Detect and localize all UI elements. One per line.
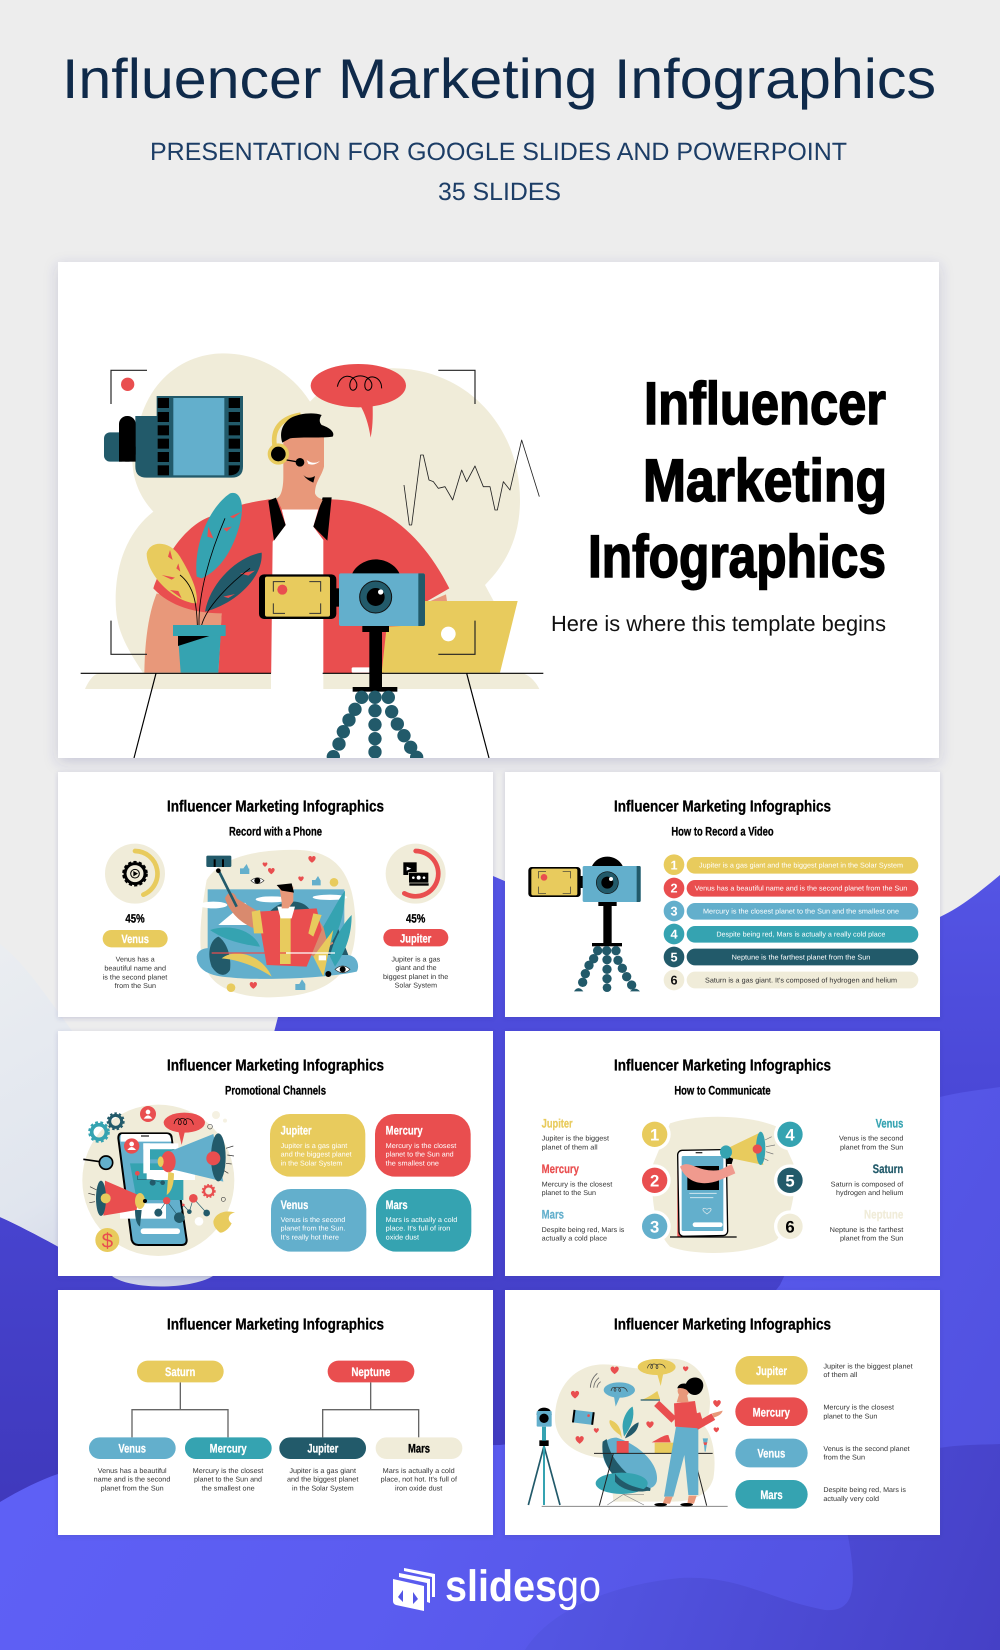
- cover heading: Marketing: [643, 447, 887, 514]
- card: Venus: It's really hot there: [281, 1234, 339, 1241]
- illustration: selfie influencer: [197, 850, 358, 997]
- card: Jupiter: in the Solar System: [281, 1159, 342, 1167]
- node: Mars: [376, 1437, 462, 1492]
- list row 6: [662, 968, 918, 992]
- node: Saturn: Saturn: [165, 1365, 195, 1379]
- text block: Venus: beautiful name and: [104, 964, 166, 972]
- card: Jupiter: [270, 1114, 365, 1177]
- percentage: 45%: [406, 911, 425, 925]
- text block: Mercury: Mercury: [542, 1162, 579, 1176]
- slide heading: Influencer Marketing Infographics: [167, 798, 384, 815]
- node: Jupiter: in the Solar System: [292, 1484, 354, 1492]
- illustration: phone and megaphones: [82, 1105, 235, 1256]
- node: Saturn: [137, 1361, 224, 1382]
- list row 1: [662, 853, 918, 877]
- illustration: phone on tripod: [528, 857, 641, 992]
- number badges: 1: [650, 1125, 659, 1144]
- text block: Neptune: Neptune: [864, 1208, 903, 1221]
- pill and text: Mercury: planet to the Sun: [823, 1412, 877, 1420]
- slide subheading: Record with a Phone: [229, 825, 322, 838]
- text block: Jupiter: [542, 1116, 609, 1151]
- text block: Mercury: [542, 1162, 612, 1197]
- node: Mars: iron oxide dust: [395, 1484, 442, 1492]
- number badges: 6: [785, 1217, 795, 1236]
- slide heading: Influencer Marketing Infographics: [614, 798, 831, 815]
- text block: Venus: planet from the Sun: [840, 1143, 903, 1151]
- card: Mars: place. It's full of iron: [386, 1225, 450, 1232]
- text block: Mars: Despite being red, Mars is: [542, 1226, 624, 1234]
- pill and text: Jupiter: Jupiter: [756, 1364, 787, 1378]
- text block: Jupiter: Jupiter: [542, 1116, 573, 1130]
- pill and text: Jupiter: [735, 1356, 913, 1385]
- text block: Venus: Venus is the second: [839, 1135, 903, 1142]
- cover heading: Infographics: [588, 523, 886, 590]
- node: Neptune: [328, 1361, 414, 1382]
- card: Mars: [376, 1189, 471, 1252]
- node: Jupiter: [279, 1437, 366, 1492]
- text block: Mercury: Mercury is the closest: [542, 1180, 612, 1188]
- panel: promotional channels: [58, 1031, 493, 1276]
- list row 4: [662, 922, 918, 946]
- node: Mars: Mars is actually a cold: [383, 1467, 455, 1475]
- text block: Jupiter: Jupiter is a gas: [391, 955, 440, 963]
- card: Venus: planet from the Sun.: [281, 1225, 345, 1232]
- tree connectors: [132, 1382, 419, 1437]
- panel: how to record a video: [505, 772, 940, 1017]
- text block: Mercury: planet to the Sun: [542, 1189, 596, 1197]
- node: Venus: [89, 1437, 176, 1492]
- percentage: 45%: [125, 911, 145, 925]
- slide heading: Influencer Marketing Infographics: [614, 1057, 831, 1074]
- cover illustration: influencer recording: [81, 353, 543, 764]
- pill and text: Venus: from the Sun: [823, 1454, 865, 1461]
- title: Influencer Marketing Infographics: [62, 47, 936, 110]
- illustration: woman showing shoes: [528, 1359, 728, 1506]
- text block: Jupiter: planet of them all: [542, 1143, 598, 1151]
- card: Mercury: Mercury is the closest: [386, 1142, 456, 1150]
- pill and text: Venus: Venus: [757, 1447, 785, 1460]
- icon: slidesgo logo: [393, 1562, 601, 1611]
- node: Jupiter: Jupiter is a gas giant: [289, 1467, 356, 1475]
- text block: Saturn: Saturn: [873, 1162, 903, 1176]
- cover heading: Influencer: [644, 370, 886, 437]
- text block: Venus: Venus has a: [116, 956, 155, 963]
- label pill: Venus: [103, 930, 168, 947]
- text block: Saturn: hydrogen and helium: [836, 1189, 903, 1197]
- list row 6: Saturn is a gas giant. It's composed of hydrogen and helium: [705, 977, 897, 984]
- text block: Venus: [103, 956, 167, 990]
- panel: shopping influencer: [505, 1290, 940, 1535]
- node: Mars: place, not hot. It's full of: [381, 1476, 457, 1483]
- panel: record with a phone: [58, 772, 493, 1017]
- list row 2: [662, 876, 918, 900]
- node: Mercury: [185, 1437, 272, 1492]
- logo wordmark: slidesgo: [445, 1562, 601, 1611]
- text block: Mars: [542, 1208, 624, 1242]
- illustration: phone with megaphone: [652, 1117, 794, 1253]
- list row 5: 5: [670, 951, 678, 965]
- label pill: Jupiter: [383, 929, 448, 946]
- slide heading: Influencer Marketing Infographics: [167, 1315, 384, 1333]
- list row 1: 1: [670, 859, 678, 873]
- list row 2: Venus has a beautiful name and is the second planet from the Sun: [695, 885, 907, 892]
- card: Mars: Mars: [386, 1198, 408, 1212]
- card: Mercury: Mercury: [386, 1124, 423, 1137]
- pill and text: Mercury: Mercury: [753, 1405, 790, 1419]
- list row 3: [662, 899, 918, 923]
- node: Jupiter: and the biggest planet: [287, 1476, 358, 1483]
- panel: hierarchy tree: [58, 1290, 493, 1535]
- text block: Jupiter: Solar System: [395, 982, 437, 989]
- slide subheading: How to Communicate: [674, 1083, 771, 1097]
- label pill: Jupiter: Jupiter: [400, 931, 431, 945]
- node: Mercury: Mercury: [210, 1442, 247, 1455]
- pill and text: Venus: Venus is the second planet: [823, 1445, 910, 1453]
- text block: Neptune: Neptune is the farthest: [830, 1226, 903, 1234]
- card: Venus: Venus: [281, 1198, 308, 1212]
- node: Venus: name and is the second: [94, 1476, 170, 1483]
- list row 4: Despite being red, Mars is actually a really cold place: [716, 931, 885, 938]
- list row 3: Mercury is the closest planet to the Sun and the smallest one: [703, 908, 899, 915]
- text block: Venus: from the Sun: [115, 982, 156, 990]
- cover tagline: Here is where this template begins: [551, 611, 886, 636]
- pill and text: Mars: Despite being red, Mars is: [823, 1486, 906, 1494]
- subtitle: [150, 138, 847, 206]
- slide subheading: How to Record a Video: [671, 825, 774, 838]
- text block: Neptune: [830, 1208, 903, 1242]
- list row 1: Jupiter is a gas giant and the biggest planet in the Solar System: [699, 862, 903, 869]
- subtitle: 35 SLIDES: [438, 178, 561, 206]
- pill and text: Mercury: Mercury is the closest: [823, 1404, 894, 1411]
- number badges: 3: [650, 1217, 659, 1236]
- card: Jupiter: Jupiter is a gas giant: [281, 1142, 347, 1150]
- node: Jupiter: Jupiter: [307, 1442, 338, 1455]
- node: Neptune: Neptune: [351, 1365, 390, 1379]
- list row 2: 2: [670, 882, 678, 896]
- node: Mars: Mars: [408, 1442, 430, 1455]
- pill and text: Jupiter: Jupiter is the biggest planet: [823, 1362, 913, 1370]
- text block: Venus: [839, 1116, 903, 1151]
- text block: Jupiter: [383, 955, 448, 989]
- text block: Jupiter: biggest planet in the: [383, 973, 448, 981]
- node: Mercury: the smallest one: [202, 1484, 255, 1492]
- list row 5: Neptune is the farthest planet from the Sun: [732, 953, 870, 961]
- card: Mercury: planet to the Sun and: [386, 1151, 454, 1158]
- subtitle: PRESENTATION FOR GOOGLE SLIDES AND POWERPOINT: [150, 138, 847, 166]
- icon: video progress ring: [386, 844, 446, 904]
- text block: Neptune: planet from the Sun: [840, 1235, 903, 1242]
- pill and text: Mars: Mars: [760, 1488, 783, 1502]
- node: Venus: Venus has a beautiful: [98, 1467, 167, 1475]
- list row 5: [662, 945, 918, 969]
- number badges: [639, 1118, 806, 1242]
- number badges: 2: [650, 1171, 659, 1190]
- slide heading: Influencer Marketing Infographics: [167, 1057, 384, 1074]
- text block: Mars: actually a cold place: [542, 1235, 607, 1242]
- pill and text: Jupiter: of them all: [823, 1371, 857, 1379]
- list row 3: 3: [670, 905, 678, 919]
- slide subheading: Promotional Channels: [225, 1083, 326, 1097]
- icon: gear progress ring: [105, 844, 165, 904]
- cover heading: [588, 370, 887, 590]
- pill and text: Mars: actually very cold: [823, 1495, 879, 1503]
- text block: Saturn: [831, 1162, 903, 1197]
- label pill: Venus: Venus: [121, 932, 149, 946]
- card: Venus: [271, 1189, 366, 1252]
- card: Venus: Venus is the second: [281, 1216, 345, 1224]
- text block: Jupiter: Jupiter is the biggest: [542, 1135, 609, 1142]
- card: Jupiter: and the biggest planet: [281, 1151, 352, 1158]
- card: Mercury: the smallest one: [386, 1159, 439, 1167]
- card: Mars: oxide dust: [386, 1234, 419, 1241]
- card: Mercury: [375, 1114, 471, 1177]
- pill and text: Mars: [735, 1480, 906, 1509]
- illustration: phone and megaphones: $: [102, 1229, 113, 1252]
- card: Mars: Mars is actually a cold: [386, 1216, 457, 1224]
- node: Mercury: Mercury is the closest: [193, 1467, 263, 1475]
- number badges: 5: [785, 1171, 795, 1190]
- panel: how to communicate: [505, 1031, 940, 1276]
- card: Jupiter: Jupiter: [281, 1124, 312, 1137]
- node: Mercury: planet to the Sun and: [194, 1476, 262, 1483]
- text block: Saturn: Saturn is composed of: [831, 1180, 903, 1188]
- pill and text: Mercury: [735, 1397, 894, 1426]
- panel: cover slide: [58, 262, 939, 764]
- text block: Venus: Venus: [876, 1116, 903, 1130]
- list row 6: 6: [670, 974, 678, 988]
- slide heading: Influencer Marketing Infographics: [614, 1315, 831, 1333]
- node: Venus: planet from the Sun: [101, 1484, 164, 1492]
- node: Venus: Venus: [118, 1442, 146, 1455]
- text block: Jupiter: giant and the: [395, 964, 437, 972]
- list row 4: 4: [670, 928, 678, 942]
- text block: Mars: Mars: [542, 1208, 564, 1221]
- pill and text: Venus: [735, 1439, 910, 1467]
- number badges: 4: [785, 1125, 795, 1144]
- text block: Venus: is the second planet: [103, 973, 167, 981]
